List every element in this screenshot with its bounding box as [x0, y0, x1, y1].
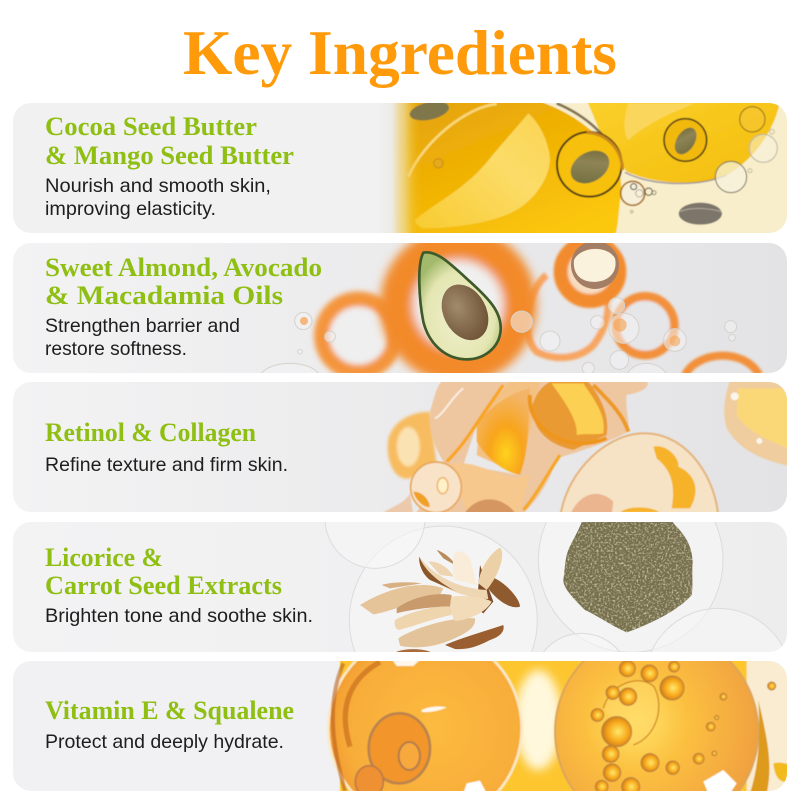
description: improving elasticity.: [45, 198, 216, 220]
description: Refine texture and firm skin.: [45, 454, 288, 476]
panel background: [13, 243, 787, 373]
panel background: [13, 522, 787, 652]
large right sphere: [554, 661, 760, 791]
title: Key Ingredients: [183, 18, 617, 88]
heading: Carrot Seed Extracts: [45, 570, 282, 600]
clear bubbles: [262, 297, 737, 373]
image: avocado and macadamia in orange oil bubbles: [262, 243, 764, 373]
panel background: [13, 661, 787, 791]
mango slice top: [624, 103, 695, 140]
heading: & Macadamia Oils: [45, 280, 283, 310]
description: Nourish and smooth skin,: [45, 175, 271, 197]
macadamia: [571, 241, 619, 289]
image: golden oil with mango slices and cocoa beans: [379, 98, 793, 237]
heading: Licorice &: [45, 542, 163, 572]
mango slice large: [415, 113, 550, 228]
heading: [45, 111, 294, 170]
heading: Vitamin E & Squalene: [45, 695, 294, 725]
licorice slices: [360, 585, 443, 614]
description: Protect and deeply hydrate.: [45, 731, 284, 753]
panel: retinol and collagen: [13, 380, 793, 518]
small bubble: [411, 462, 461, 513]
description: restore softness.: [45, 338, 187, 360]
avocado: [419, 252, 501, 359]
panel: licorice and carrot seed: [13, 522, 787, 780]
panel: cocoa and mango butter: [13, 98, 793, 237]
panel background: [13, 382, 787, 512]
large left sphere: [326, 661, 522, 791]
oil beads: [591, 661, 776, 796]
bubble inside left sphere: [369, 713, 430, 783]
cocoa bean bubble: [557, 132, 622, 197]
description: Strengthen barrier and: [45, 315, 240, 337]
panel: almond avocado macadamia oils: [13, 243, 787, 373]
carrot seeds: [563, 518, 693, 632]
image: golden oil spheres with bubbles: [326, 661, 787, 791]
heading: Sweet Almond, Avocado: [45, 252, 322, 282]
orange rings: [322, 299, 395, 372]
central gel: [413, 380, 648, 517]
image: licorice root slices and carrot seeds in glass dishes: [324, 522, 782, 652]
small oil bubbles: [740, 107, 765, 132]
big round bubble: [560, 433, 718, 518]
description: [45, 315, 240, 360]
description: [45, 175, 271, 220]
heading: Cocoa Seed Butter: [45, 111, 257, 141]
panel background: [13, 103, 787, 233]
heading: & Mango Seed Butter: [45, 140, 294, 170]
heading: Retinol & Collagen: [45, 417, 256, 447]
inner bubble outline: [603, 681, 659, 745]
heading: [45, 252, 322, 310]
panel: vitamin E and squalene: [13, 661, 787, 791]
glass dishes: [324, 522, 782, 652]
left fade: [379, 100, 421, 237]
gel side blobs: [388, 412, 437, 479]
heading: [45, 542, 282, 600]
yellow backdrop: [339, 661, 748, 791]
image: golden collagen gel: [380, 380, 793, 518]
description: Brighten tone and soothe skin.: [45, 605, 313, 627]
